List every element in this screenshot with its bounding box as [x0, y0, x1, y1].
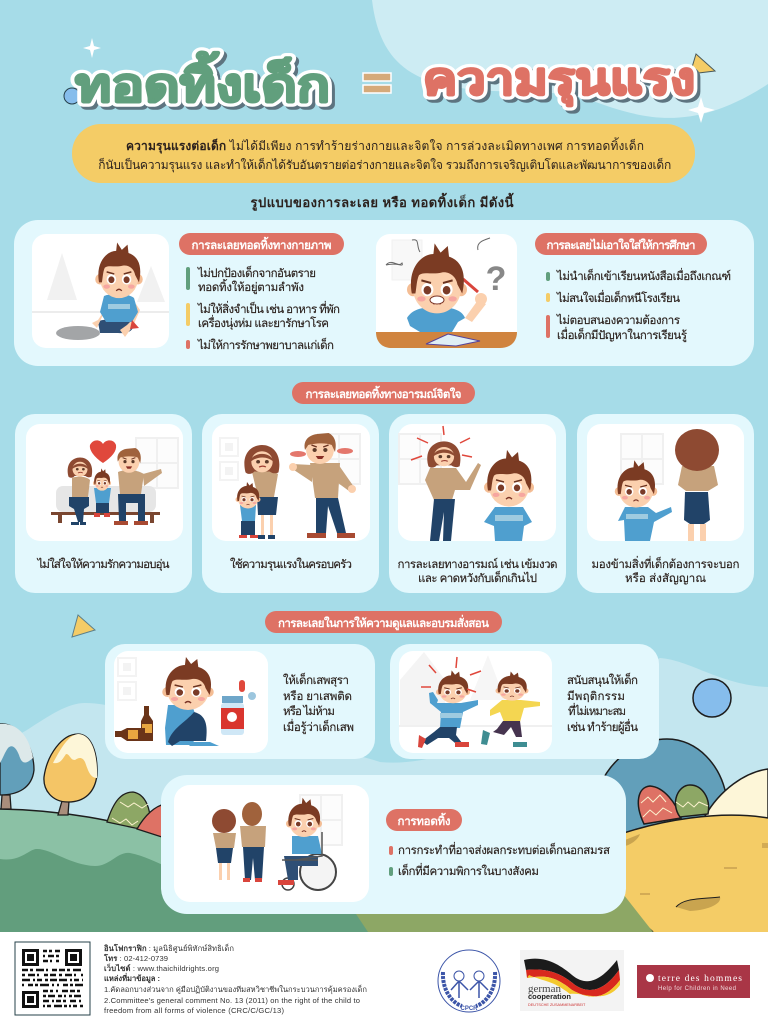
- landscape: left hills: [0, 809, 653, 932]
- intro callout: ความรุนแรงต่อเด็ก ไม่ได้มีเพียง การทำร้ายร่างกายและจิตใจ การล่วงละเมิดทางเพศ การทอดทิ้งเด็ก: [126, 137, 644, 154]
- card: abandonment: [161, 775, 626, 914]
- text: หรือ ยาเสพติด: [283, 690, 352, 703]
- decor: blue circle: [693, 679, 731, 717]
- list: education neglect: [546, 268, 731, 342]
- badge: emotional neglect: การละเลยทอดทิ้งทางอารมณ์จิตใจ: [306, 385, 462, 401]
- text: มีพฤติกรรม: [567, 690, 625, 703]
- left eggs: [107, 792, 165, 838]
- contact and sources text: อินโฟกราฟิก : มูลนิธิศูนย์พิทักษ์สิทธิเด็ก: [104, 943, 234, 953]
- caption: การละเลยทางอารมณ์ เช่น เข้มงวด: [398, 557, 558, 571]
- text: [283, 672, 354, 734]
- badge: care and guidance neglect: การละเลยในการให้ความดูแลและอบรมสั่งสอน: [278, 614, 489, 631]
- badge: education neglect: การละเลยไม่เอาใจใส่ให้การศึกษา: [546, 238, 696, 252]
- title: ความรุนแรง: [423, 55, 695, 107]
- logo: terre des hommes: [637, 965, 750, 998]
- panel: physical and education neglect: [14, 220, 754, 366]
- title: ความรุนแรง: [423, 55, 695, 107]
- illustration: shouting woman and sad boy: [411, 426, 534, 541]
- card: harming others: [390, 644, 659, 759]
- contact and sources text: [103, 943, 367, 1015]
- title: [75, 51, 698, 114]
- list: abandonment: [389, 842, 610, 878]
- badge: abandonment: การทอดทิ้ง: [398, 812, 451, 828]
- logo: German Cooperation: cooperation: [528, 992, 571, 1001]
- logo: terre des hommes: Help for Children in Need: [658, 986, 736, 992]
- logo: CPCR: CPCR: [460, 1006, 478, 1012]
- illustration: parents turning away from boy in wheelchair: [212, 798, 336, 890]
- logo: terre des hommes: terre des hommes: [658, 974, 742, 984]
- text: ให้เด็กเสพสุรา: [283, 672, 349, 687]
- title: ทอดทิ้งเด็ก: [75, 51, 330, 111]
- caption: หรือ ส่งสัญญาณ: [625, 572, 706, 585]
- text: สนับสนุนให้เด็ก: [567, 672, 638, 687]
- caption: มองข้ามสิ่งที่เด็กต้องการจะบอก: [592, 556, 740, 571]
- decor: yellow triangle mid-left: [72, 615, 95, 637]
- landscape: yellow hill: [612, 815, 768, 932]
- logo: CPCR: [438, 950, 500, 1012]
- list: education neglect: เมื่อเด็กมีปัญหาในการเรียนรู้: [557, 327, 687, 342]
- caption: ไม่ใส่ใจให้ความรักความอบอุ่น: [36, 558, 170, 571]
- badge: emotional neglect: [292, 382, 475, 404]
- list: physical neglect: [186, 265, 340, 352]
- illustration: boy with alcohol and drugs: [115, 657, 256, 746]
- title: ทอดทิ้งเด็ก: [78, 54, 333, 114]
- contact and sources text: freedom from all forms of violence (CRC/C/GC/13): [104, 1006, 284, 1015]
- caption: [592, 556, 740, 585]
- card: no love and warmth: [15, 414, 192, 593]
- intro callout: [72, 124, 695, 183]
- list: physical neglect: ไม่ให้สิ่งจำเป็น เช่น อาหาร ที่พัก: [197, 301, 340, 316]
- card: domestic violence: [202, 414, 379, 593]
- card: strict and over-expectation: [389, 414, 566, 593]
- list: education neglect: ไม่สนใจเมื่อเด็กหนีโรงเรียน: [556, 290, 680, 305]
- contact and sources text: 2.Committee's general comment No. 13 (2011) on the right of the child to: [104, 996, 360, 1005]
- list: physical neglect: เครื่องนุ่งห่ม และยารักษาโรค: [198, 315, 329, 330]
- decor: title sparkles and shapes: [64, 38, 715, 123]
- text: [567, 672, 638, 734]
- title: ความรุนแรง: [426, 58, 698, 110]
- badge: physical neglect: [179, 233, 344, 255]
- landscape: blue hill and cream hill: [600, 739, 768, 860]
- card: substance use: [105, 644, 375, 759]
- list: education neglect: ไม่ตอบสนองความต้องการ: [556, 314, 680, 327]
- QR code: [15, 942, 90, 1015]
- illustration: two boys chasing: [418, 657, 540, 748]
- text: เช่น ทำร้ายผู้อื่น: [567, 719, 638, 734]
- list: abandonment: การกระทำที่อาจส่งผลกระทบต่อเด็กนอกสมรส: [398, 842, 610, 857]
- list: education neglect: ไม่นำเด็กเข้าเรียนหนังสือเมื่อถึงเกณฑ์: [556, 268, 731, 283]
- list: physical neglect: ทอดทิ้งให้อยู่ตามลำพัง: [198, 279, 304, 294]
- logo: German Cooperation: [520, 950, 624, 1011]
- illustration: family on sofa with broken heart: [51, 440, 162, 525]
- illustration: hungry boy with empty plate: [32, 234, 169, 348]
- caption: และ คาดหวังกับเด็กเกินไป: [418, 570, 537, 585]
- footer: [0, 932, 768, 1024]
- title: ทอดทิ้งเด็ก: [75, 51, 330, 111]
- illustration: angry man, woman and crying child: [236, 433, 356, 539]
- badge: education neglect: [535, 233, 707, 255]
- tree: blue: [0, 724, 34, 809]
- contact and sources text: 1.คัดลอกบางส่วนจาก คู่มือปฏิบัติงานของทีมสหวิชาชีพในกระบวนการคุ้มครองเด็ก: [104, 984, 367, 994]
- caption: [398, 557, 558, 585]
- illustration: confused boy studying: ?: [486, 260, 506, 298]
- card: ignoring child's signals: [577, 414, 754, 593]
- landscape: right eggs: [638, 785, 709, 824]
- list: abandonment: เด็กที่มีความพิการในบางสังคม: [398, 863, 539, 878]
- logo: German Cooperation: german: [528, 983, 561, 995]
- badge: physical neglect: การละเลยทอดทิ้งทางกายภาพ: [192, 236, 332, 252]
- contact and sources text: โทร : 02-412-0739: [103, 953, 168, 963]
- badge: abandonment: [386, 809, 462, 831]
- list: physical neglect: ไม่ให้การรักษาพยาบาลแก่เด็ก: [197, 337, 334, 352]
- illustration: boy reaching to woman's back: [615, 429, 719, 541]
- subheading: รูปแบบของการละเลย หรือ ทอดทิ้งเด็ก มีดังนี้: [250, 192, 514, 211]
- contact and sources text: แหล่งที่มาข้อมูล :: [104, 972, 160, 984]
- tree: yellow: [44, 734, 97, 815]
- intro callout: ก็นับเป็นความรุนแรง และทำให้เด็กได้รับอันตรายต่อร่างกายและจิตใจ รวมถึงการเจริญเติบโตและพัฒนาการของเด็ก: [98, 157, 671, 173]
- text: เมื่อรู้ว่าเด็กเสพ: [283, 719, 354, 734]
- caption: ใช้ความรุนแรงในครอบครัว: [230, 558, 352, 571]
- badge: care and guidance neglect: [265, 611, 502, 633]
- text: หรือ ไม่ห้าม: [283, 705, 335, 718]
- logo: German Cooperation: DEUTSCHE ZUSAMMENARBEIT: [528, 1003, 586, 1007]
- illustration: confused boy studying: [376, 234, 517, 348]
- contact and sources text: เว็บไซต์ : www.thaichildrights.org: [104, 962, 219, 973]
- text: ที่ไม่เหมาะสม: [568, 703, 626, 718]
- list: physical neglect: ไม่ปกป้องเด็กจากอันตราย: [197, 265, 316, 280]
